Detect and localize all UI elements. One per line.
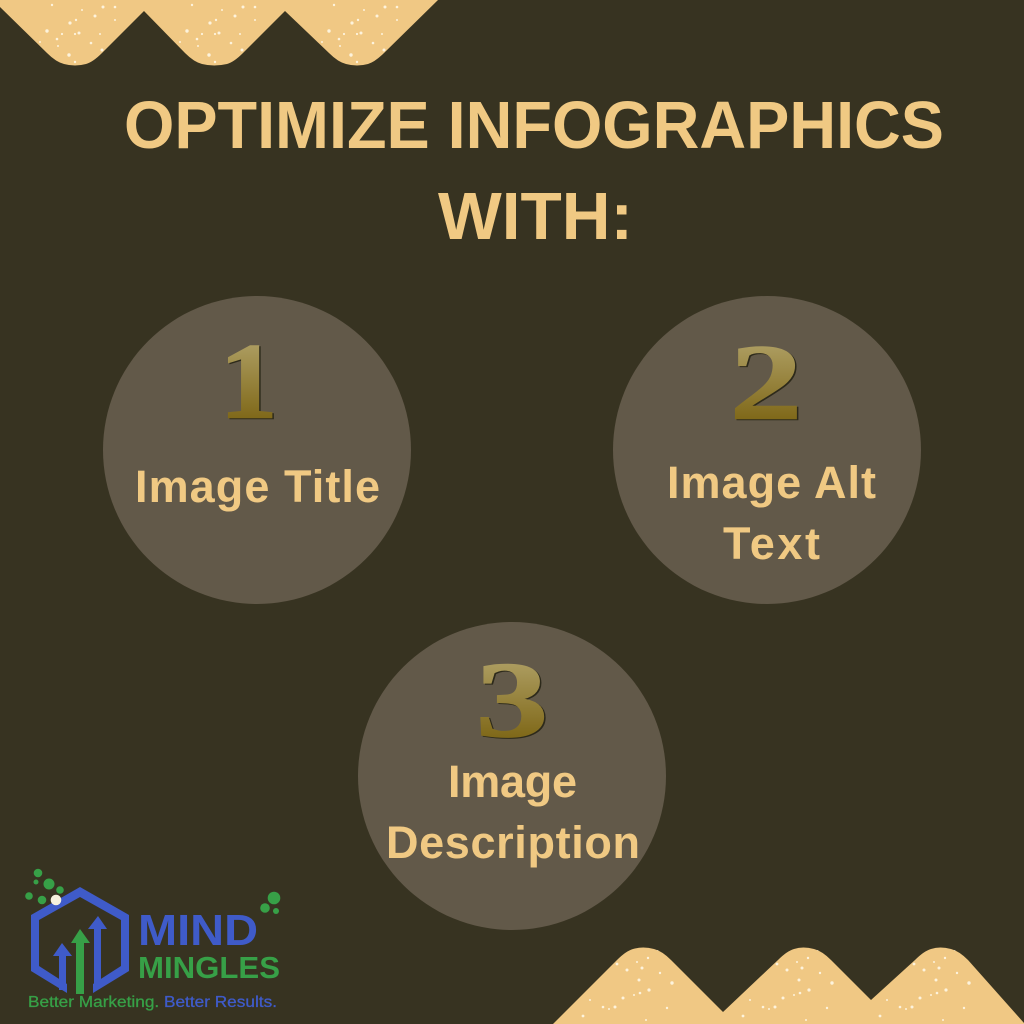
- label: image description: [386, 756, 640, 868]
- logo wordmark: MIND: [138, 906, 258, 955]
- label: image alt text: [667, 457, 876, 569]
- icon: house with arrows: [31, 887, 129, 994]
- number 2: 2: [732, 324, 804, 444]
- label: image alt text: Text: [723, 518, 820, 569]
- number 2: 2: [730, 324, 802, 442]
- logo wordmark: [138, 906, 280, 985]
- decorative top zigzag band: [0, 0, 438, 66]
- logo: mind mingles: [25, 869, 280, 1011]
- number 3: 3: [476, 641, 548, 760]
- label: image description: Image: [448, 756, 577, 807]
- label: image title: Image Title: [135, 461, 380, 512]
- label: image description: Description: [386, 817, 640, 868]
- title: OPTIMIZE INFOGRAPHICS: [124, 88, 944, 163]
- decorative bottom zigzag band: [553, 948, 1024, 1024]
- number 1: 1: [221, 324, 279, 442]
- panel: item 3 image description: [358, 622, 666, 930]
- icon: green dots: [25, 869, 280, 914]
- number 3: 3: [478, 642, 550, 761]
- logo tagline: Better Marketing. Better Results.: [28, 994, 277, 1011]
- logo wordmark: MINGLES: [138, 950, 280, 985]
- title: [124, 88, 944, 254]
- panel: item 1 image title: [103, 296, 411, 604]
- title: WITH:: [438, 179, 633, 254]
- panel: item 2 image alt text: [613, 296, 921, 604]
- number 1: 1: [220, 322, 278, 442]
- label: image alt text: Image Alt: [667, 457, 876, 508]
